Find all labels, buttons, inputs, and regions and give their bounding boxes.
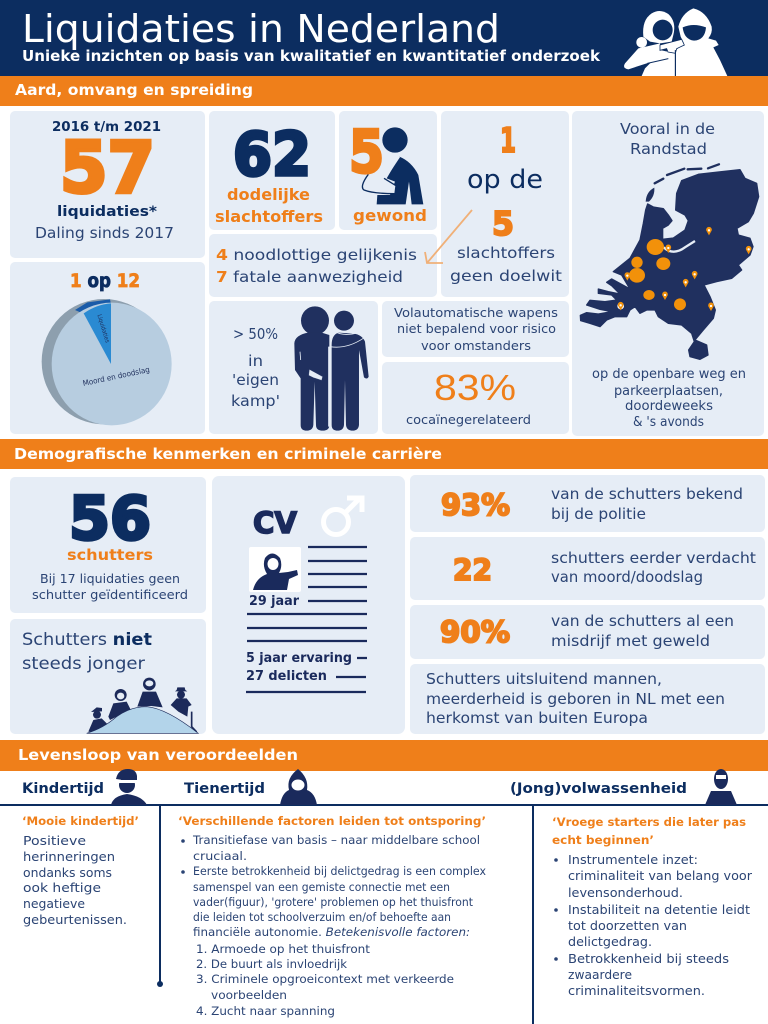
- column: Verschillende factoren: vader(figuur), 'grotere' problemen op het thuisfront: [193, 895, 473, 909]
- pie chart: [42, 299, 172, 425]
- panel: schutters uitsluitend mannen: herkomst van buiten Europa: [426, 709, 648, 727]
- column: Mooie kindertijd: [22, 814, 139, 927]
- column: Verschillende factoren: Eerste betrokkenheid bij delictgedrag is een complex: [193, 864, 486, 878]
- icon: teen in hood: [280, 769, 317, 805]
- panel: 62 dodelijke slachtoffers: slachtoffers: [215, 207, 323, 226]
- panel: schutters uitsluitend mannen: [410, 664, 765, 734]
- panel: noodlottige gelijkenis: 7 fatale aanwezigheid: [216, 268, 403, 286]
- panel: 83%: [382, 362, 569, 434]
- panel: 90%: van de schutters al een: [551, 612, 734, 630]
- panel: CV: 27 delicten: [246, 669, 327, 684]
- panel: 57 liquidaties: liquidaties*: [57, 204, 157, 220]
- column: Verschillende factoren: 2. De buurt als invloedrijk: [196, 957, 347, 971]
- stage: (Jong)volwassenheid: [510, 769, 737, 805]
- section heading: Aard, omvang en spreiding: Aard, omvang en spreiding: [15, 81, 253, 99]
- icon: figures on a hill: [87, 678, 198, 733]
- panel: 62 dodelijke slachtoffers: [209, 111, 335, 230]
- panel: 5 gewond: [339, 111, 437, 230]
- panel: 57 liquidaties: 2016 t/m 2021: [52, 119, 161, 135]
- column: Verschillende factoren: die leiden tot schoolverzuim en/of behoefte aan: [193, 910, 451, 924]
- heading 1 op 12: 1 op 12: [70, 270, 140, 292]
- map of the Netherlands: [580, 164, 759, 359]
- panel: 1 op de 5: geen doelwit: [450, 267, 562, 285]
- timeline lines: [0, 805, 768, 1024]
- section heading: Aard, omvang en spreiding: [0, 76, 768, 106]
- panel: CV: 5 jaar ervaring: [246, 651, 352, 666]
- column: Mooie kindertijd: ondanks soms: [23, 865, 112, 880]
- panel: 62 dodelijke slachtoffers: dodelijke: [227, 185, 310, 204]
- column: Vroege starters: criminaliteitsvormen.: [568, 983, 705, 998]
- column: Vroege starters: zwaardere: [568, 967, 632, 982]
- column: Vroege starters: Instabiliteit na detentie leidt: [568, 902, 750, 917]
- column: Mooie kindertijd: herinneringen: [23, 849, 115, 864]
- panel: 22: schutters eerder verdacht: [551, 549, 756, 567]
- icon: injured person with sling: [362, 127, 423, 204]
- panel: 93%: 93%: [441, 488, 510, 522]
- panel: 22: 22: [453, 553, 492, 587]
- panel: 56 schutters: [10, 477, 206, 613]
- panel: CV: [212, 476, 405, 734]
- panel: in eigen kamp: [209, 301, 378, 434]
- panel: 93%: van de schutters bekend: [551, 485, 743, 503]
- panel: map Randstad: Vooral in de: [620, 120, 715, 138]
- column: Verschillende factoren: [178, 814, 486, 1018]
- panel: noodlottige gelijkenis: [209, 234, 437, 297]
- panel: map Randstad: Randstad: [630, 140, 707, 158]
- panel: 5 gewond: 5: [349, 117, 384, 186]
- stage: Tienertijd: Tienertijd: [184, 781, 265, 797]
- section heading: Levensloop van veroordeelden: [0, 740, 768, 771]
- panel: schutters niet steeds jonger: steeds jonger: [22, 654, 145, 674]
- column: Vroege starters: Betrokkenheid bij steeds: [568, 951, 729, 966]
- panel: volautomatische wapens: niet bepalend voor risico: [397, 321, 556, 336]
- panel: 22: [410, 537, 765, 600]
- pie chart: Moord en doodslag: [82, 365, 151, 388]
- stage: Tienertijd: [184, 769, 317, 805]
- icon: child with cap: [111, 769, 147, 805]
- panel: 56 schutters: 56: [69, 484, 151, 554]
- panel: CV: CV: [253, 506, 298, 540]
- panel: 1 op 12 pie chart: [10, 262, 205, 434]
- panel: 56 schutters: schutter geïdentificeerd: [32, 588, 188, 602]
- panel: 83%: 83%: [434, 367, 516, 408]
- panel: in eigen kamp: in: [248, 352, 263, 370]
- panel: noodlottige gelijkenis: 4 noodlottige gelijkenis: [216, 246, 417, 264]
- column: Verschillende factoren: samenspel van een gemiste connectie met een: [193, 880, 450, 894]
- panel: 90%: 90%: [440, 615, 510, 649]
- column: Verschillende factoren: 3. Criminele opgroeicontext met verkeerde: [196, 972, 454, 986]
- panel: map Randstad: doordeweeks: [625, 399, 713, 414]
- arrow: [425, 210, 472, 263]
- cv lines: [246, 547, 367, 692]
- column: Verschillende factoren: ‘Verschillende factoren leiden tot ontsporing’: [178, 814, 486, 828]
- stage: Kindertijd: [22, 769, 147, 805]
- panel: 1 op de 5: [441, 111, 569, 297]
- panel: 1 op de 5: slachtoffers: [457, 244, 555, 262]
- panel: map Randstad: [572, 111, 764, 436]
- icon: two figures: [294, 306, 369, 431]
- column: Verschillende factoren: financiële autonomie. Betekenisvolle factoren:: [193, 925, 470, 939]
- column: Vroege starters: levensonderhoud.: [568, 885, 683, 900]
- stage: Kindertijd: Kindertijd: [22, 781, 104, 797]
- panel: 57 liquidaties: Daling sinds 2017: [35, 224, 174, 242]
- column: Vroege starters: tot doorzetten van: [568, 918, 687, 933]
- icon: adult with beard: [705, 769, 737, 805]
- column: Mooie kindertijd: ook heftige: [23, 880, 101, 895]
- panel: 93%: bij de politie: [551, 505, 646, 523]
- panel: in eigen kamp: > 50%: [233, 325, 278, 343]
- column: Verschillende factoren: 4. Zucht naar spanning: [196, 1004, 335, 1018]
- column: Verschillende factoren: Transitiefase van basis – naar middelbare school: [192, 833, 480, 847]
- column: Vroege starters: criminaliteit van belang voor: [568, 868, 753, 883]
- header band: [0, 0, 768, 76]
- portrait: [249, 547, 301, 592]
- panel: schutters niet steeds jonger: Schutters niet: [22, 630, 152, 650]
- subtitle: Unieke inzichten op basis van kwalitatief en kwantitatief onderzoek: [22, 47, 601, 65]
- panel: in eigen kamp: 'eigen: [232, 371, 279, 389]
- panel: 1 op de 5: op de: [467, 165, 543, 195]
- panel: map Randstad: op de openbare weg en: [592, 367, 746, 382]
- panel: 90%: misdrijf met geweld: [551, 632, 710, 650]
- pie chart: Liquidaties: [95, 314, 111, 344]
- panel: 62 dodelijke slachtoffers: 62: [233, 120, 311, 190]
- column: Mooie kindertijd: gebeurtenissen.: [23, 912, 127, 927]
- panel: map Randstad: & 's avonds: [633, 415, 704, 430]
- column: Mooie kindertijd: ‘Mooie kindertijd’: [22, 814, 139, 828]
- section heading: Demografische kenmerken: Demografische kenmerken en criminele carrière: [14, 445, 442, 463]
- panel: 1 op de 5: 1: [500, 121, 516, 161]
- panel: 56 schutters: Bij 17 liquidaties geen: [40, 572, 180, 586]
- title: Liquidaties in Nederland: [22, 7, 500, 51]
- column: Mooie kindertijd: negatieve: [23, 896, 85, 911]
- panel: in eigen kamp: kamp': [231, 392, 280, 410]
- column: Verschillende factoren: cruciaal.: [193, 849, 247, 863]
- icon: male symbol: [324, 498, 362, 534]
- stage: (Jong)volwassenheid: (Jong)volwassenheid: [510, 781, 687, 797]
- panel: 56 schutters: schutters: [67, 546, 153, 564]
- column: Vroege starters: echt beginnen’: [552, 833, 654, 847]
- column: Vroege starters: ‘Vroege starters die later pas: [552, 815, 746, 829]
- panel: CV: 29 jaar: [249, 594, 300, 609]
- big number 57: 57: [60, 127, 155, 209]
- panel: 90%: [410, 605, 765, 659]
- column: Vroege starters: [552, 815, 753, 998]
- panel: schutters uitsluitend mannen: Schutters uitsluitend mannen,: [426, 670, 662, 688]
- panel: volautomatische wapens: [382, 301, 569, 357]
- column: Vroege starters: delictgedrag.: [568, 934, 652, 949]
- panel: schutters uitsluitend mannen: meerderheid is geboren in NL met een: [426, 690, 725, 708]
- panel: map Randstad: parkeerplaatsen,: [614, 384, 723, 399]
- panel: 5 gewond: gewond: [353, 206, 427, 225]
- panel: volautomatische wapens: Volautomatische wapens: [394, 305, 558, 320]
- panel: schutters niet steeds jonger: [10, 619, 206, 734]
- panel: 57 liquidaties: [10, 111, 205, 258]
- panel: 93%: [410, 475, 765, 532]
- section heading: Levensloop van veroordeelden: Levensloop van veroordeelden: [18, 746, 298, 764]
- panel: volautomatische wapens: voor omstanders: [421, 338, 531, 353]
- column: Verschillende factoren: 1. Armoede op het thuisfront: [196, 942, 371, 956]
- section heading: Demografische kenmerken: [0, 439, 768, 469]
- panel: 1 op de 5: 5: [492, 204, 514, 243]
- column: Verschillende factoren: voorbeelden: [211, 988, 287, 1002]
- icon: two hooded figures with gun: [624, 8, 727, 76]
- panel: 22: van moord/doodslag: [551, 568, 703, 586]
- column: Vroege starters: Instrumentele inzet:: [568, 852, 698, 867]
- column: Mooie kindertijd: Positieve: [23, 833, 86, 848]
- panel: 83%: cocaïnegerelateerd: [406, 412, 531, 427]
